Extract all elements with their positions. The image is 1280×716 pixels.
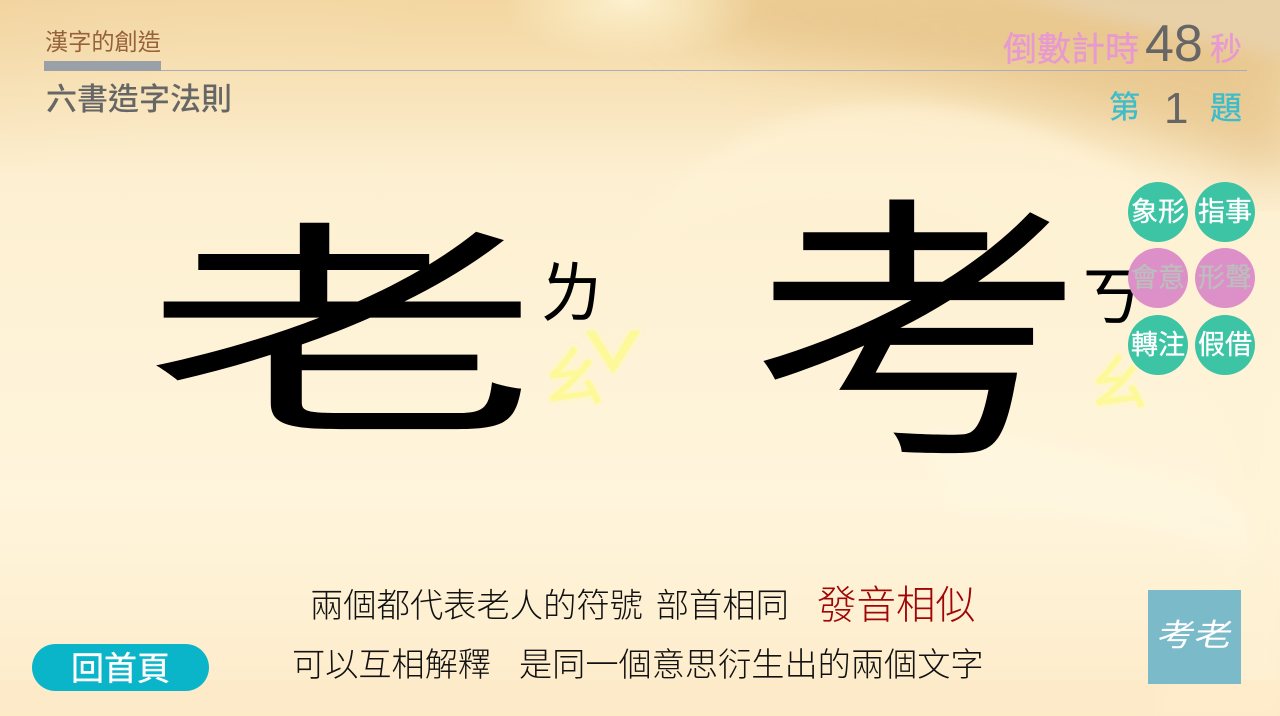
- bopomofo: ㄠ: ㄠ: [540, 340, 606, 414]
- large character: 老: 老: [143, 208, 541, 465]
- bopomofo: ㄠ: ㄠ: [1087, 349, 1149, 418]
- countdown label: 倒數計時: [1003, 31, 1139, 69]
- large character: 考: 考: [750, 182, 1085, 493]
- bopomofo: ㄌ: ㄌ: [538, 257, 605, 332]
- home button: 回首頁: [71, 650, 170, 687]
- button: 假借: 假借: [1198, 330, 1252, 360]
- heading: lesson name: 漢字的創造: [45, 29, 161, 55]
- line 1: 兩個都代表老人的符號 部首相同: [310, 588, 789, 625]
- explanation text: [292, 584, 984, 684]
- six-category buttons: [1128, 182, 1255, 375]
- button: 指事: [1195, 182, 1255, 242]
- question number: [1109, 84, 1242, 133]
- seconds unit: 秒: [1210, 31, 1242, 67]
- countdown number: 48: [1145, 15, 1203, 73]
- subtitle: 六書造字法則: [46, 82, 232, 117]
- answer tile: 考老: 考老: [1154, 618, 1235, 653]
- active tab bar: [44, 61, 161, 71]
- button: 象形: 象形: [1131, 197, 1185, 227]
- answer tile: 考老: [1148, 590, 1241, 684]
- button: 轉注: [1128, 315, 1188, 375]
- button: 假借: [1195, 315, 1255, 375]
- countdown timer: [1003, 15, 1242, 73]
- button: 轉注: 轉注: [1131, 330, 1185, 360]
- header: section tab: [44, 29, 161, 71]
- label: 第: 第: [1109, 90, 1140, 125]
- highlight: similar pronunciation: 發音相似: [817, 584, 975, 628]
- button: 會意: 會意: [1131, 263, 1185, 293]
- number: 1: 1: [1164, 84, 1188, 133]
- button: 會意: [1128, 248, 1188, 308]
- button: 形聲: 形聲: [1198, 263, 1252, 293]
- home button: [32, 644, 209, 691]
- tone mark: third tone: ˇ: [580, 293, 646, 453]
- line 2 continued: 是同一個意思衍生出的兩個文字: [519, 647, 984, 684]
- button: 指事: 指事: [1198, 197, 1252, 227]
- line 2: 可以互相解釋: [292, 647, 491, 684]
- label: 題: 題: [1210, 90, 1242, 126]
- bopomofo: ㄎ: ㄎ: [1081, 260, 1147, 334]
- button: 象形: [1128, 182, 1188, 242]
- button: 形聲: [1195, 248, 1255, 308]
